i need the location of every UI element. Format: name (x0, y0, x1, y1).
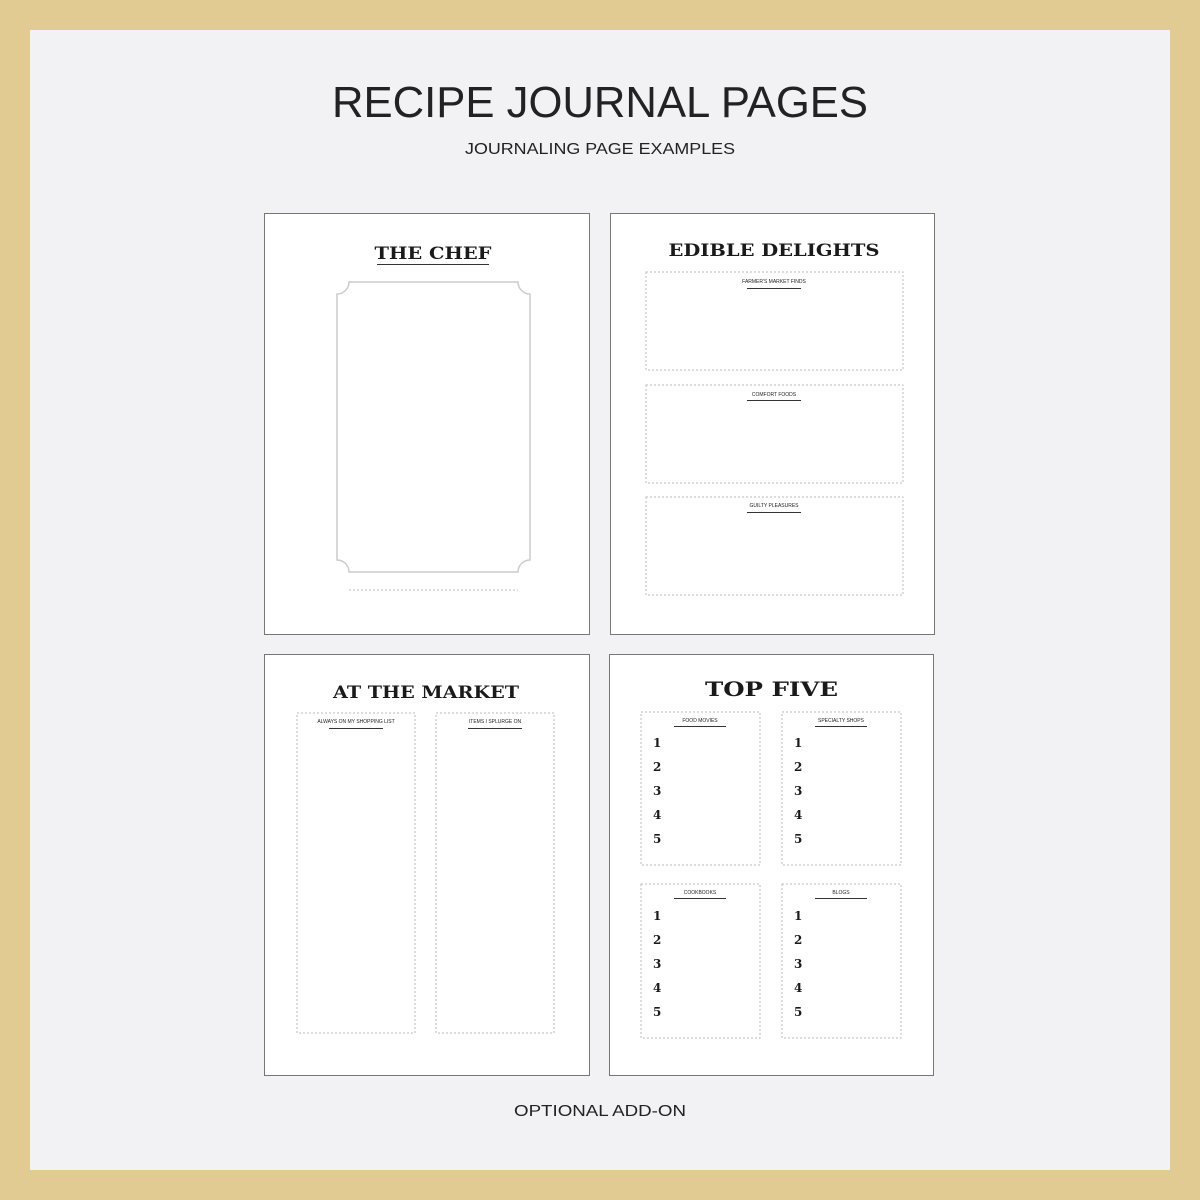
box: comfort foods: COMFORT FOODS (752, 392, 797, 398)
list: cookbooks: COOKBOOKS (684, 890, 717, 896)
list: blogs: 2 (794, 933, 802, 947)
list: food movies: 3 (653, 784, 661, 798)
box: guilty pleasures: GUILTY PLEASURES (750, 503, 799, 509)
list: cookbooks: 4 (653, 981, 661, 995)
heading: at the market: AT THE MARKET (332, 683, 519, 703)
list: specialty shops: 2 (794, 760, 802, 774)
list: specialty shops: 5 (794, 832, 802, 846)
list: cookbooks (641, 884, 760, 1038)
list: blogs: 3 (794, 957, 802, 971)
list: cookbooks: 3 (653, 957, 661, 971)
list: food movies: 2 (653, 760, 661, 774)
footer: OPTIONAL ADD-ON (514, 1103, 686, 1120)
list: specialty shops: SPECIALTY SHOPS (818, 718, 865, 724)
subtitle: JOURNALING PAGE EXAMPLES (465, 141, 735, 158)
list: cookbooks: 1 (653, 909, 661, 923)
page: at the market (264, 654, 590, 1076)
list: food movies: FOOD MOVIES (682, 718, 718, 724)
list: specialty shops (782, 712, 901, 865)
column: items i splurge on: ITEMS I SPLURGE ON (469, 719, 522, 725)
box: farmer's market finds: FARMER'S MARKET FINDS (742, 279, 806, 285)
list: blogs: 1 (794, 909, 802, 923)
page: the chef (264, 214, 590, 634)
list: food movies: 5 (653, 832, 661, 846)
column: always on my shopping list: ALWAYS ON MY SHOPPING LIST (317, 719, 395, 725)
heading: edible delights: EDIBLE DELIGHTS (668, 241, 880, 261)
column: always on my shopping list (297, 713, 415, 1033)
list: cookbooks: 2 (653, 933, 661, 947)
page: top five (610, 654, 934, 1076)
heading: top five: TOP FIVE (705, 677, 838, 701)
box: comfort foods (646, 385, 903, 483)
list: cookbooks: 5 (653, 1005, 661, 1019)
title: RECIPE JOURNAL PAGES (332, 78, 868, 127)
box: guilty pleasures (646, 497, 903, 595)
list: blogs (782, 884, 901, 1038)
photo frame (337, 282, 530, 572)
list: food movies: 4 (653, 808, 661, 822)
list: food movies (641, 712, 760, 865)
heading: the chef: THE CHEF (374, 244, 492, 264)
list: specialty shops: 3 (794, 784, 802, 798)
box: farmer's market finds (646, 272, 903, 370)
list: blogs: 4 (794, 981, 802, 995)
page: edible delights (610, 214, 934, 634)
list: specialty shops: 4 (794, 808, 802, 822)
column: items i splurge on (436, 713, 554, 1033)
list: food movies: 1 (653, 736, 661, 750)
list: blogs: BLOGS (832, 890, 850, 896)
list: specialty shops: 1 (794, 736, 802, 750)
list: blogs: 5 (794, 1005, 802, 1019)
